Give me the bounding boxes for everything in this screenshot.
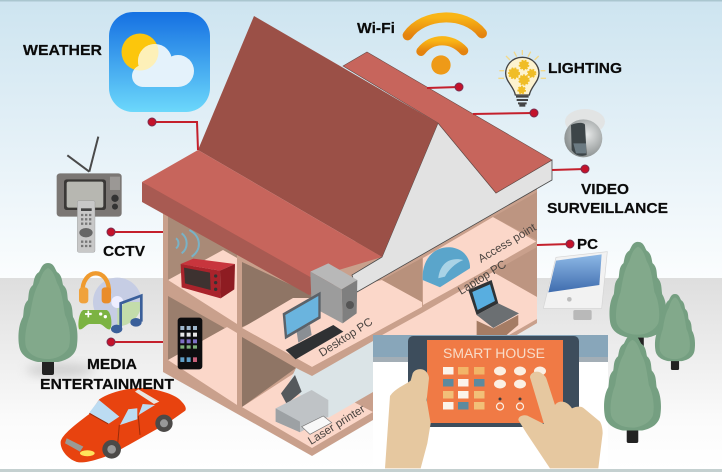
room: bottom left floor (168, 327, 237, 405)
label: Laser printer: Laser printer (306, 403, 367, 448)
label: VIDEO SURVEILLANCE (547, 181, 668, 217)
tablet control grid (443, 367, 484, 410)
connector: wifi (427, 83, 463, 91)
label: PC: PC (577, 236, 598, 253)
tablet body (408, 336, 579, 427)
connector: media (107, 338, 163, 346)
tablet (408, 336, 579, 427)
icon: laptop (468, 280, 519, 335)
room: centre floor (242, 280, 422, 367)
tablet panel: strip shadow (373, 357, 608, 362)
hand: left (385, 369, 431, 468)
icon: dome camera (564, 109, 605, 157)
connector: weather (148, 118, 198, 150)
icon: desktop PC (283, 263, 357, 359)
room: printer shaded wall (288, 341, 373, 418)
house base walls (163, 185, 537, 456)
icon: media entertainment (78, 273, 142, 333)
label: Wi-Fi: Wi-Fi (357, 20, 395, 37)
label: MEDIA ENTERTAINMENT: ENTERTAINMENT (40, 376, 174, 393)
icon: iMac (543, 252, 607, 320)
label: MEDIA ENTERTAINMENT (40, 356, 174, 393)
background: sky (0, 0, 722, 278)
icon: light bulb (498, 50, 546, 107)
roof: eave side (142, 182, 345, 295)
room: upper right floor (423, 217, 537, 305)
label: VIDEO SURVEILLANCE: SURVEILLANCE (547, 200, 668, 217)
tablet title: SMART HOUSE (443, 346, 545, 361)
icon: wireless waves (176, 230, 199, 257)
room: laptop floor (373, 272, 537, 415)
icon: TV with remote (57, 137, 122, 252)
roof: eave top (142, 150, 382, 278)
tablet screen (427, 340, 563, 423)
icon: car (61, 388, 186, 462)
icon: printer (276, 375, 332, 434)
connector: video (552, 165, 589, 173)
room: printer dark wall (242, 337, 296, 407)
upper right slab edge (422, 241, 537, 313)
label: VIDEO SURVEILLANCE: VIDEO (581, 181, 629, 198)
tablet panel: white backing (373, 362, 608, 469)
roof: right slope (343, 52, 552, 193)
top border strip (0, 0, 722, 2)
gable wall (352, 123, 552, 292)
room: top left wall (168, 200, 237, 281)
tree: right small (655, 294, 695, 370)
tree: front right (604, 335, 661, 443)
centre slab edge (242, 307, 422, 375)
room: bottom left wall (168, 296, 237, 360)
room: top left floor (168, 250, 237, 324)
icon: smartphone (178, 318, 202, 369)
room: upper right side wall (382, 258, 422, 302)
tree shadow: left (26, 363, 94, 377)
room: centre wall (242, 262, 315, 327)
laptop floor edge (373, 319, 537, 418)
bottom border strip (0, 469, 722, 472)
label: WEATHER: WEATHER (23, 42, 102, 59)
tablet panel: strip (373, 335, 608, 362)
hand: right (518, 372, 603, 468)
tree: left (18, 263, 78, 375)
icon: wifi (408, 17, 482, 75)
connector: lighting (473, 109, 538, 117)
icon: router (423, 247, 470, 287)
room: printer floor (242, 372, 373, 448)
connector: pc (537, 240, 574, 248)
room: upper right back wall (493, 192, 537, 240)
house (163, 185, 537, 456)
label: CCTV: CCTV (103, 243, 145, 260)
label: Desktop PC: Desktop PC (317, 316, 375, 360)
tablet dials (494, 366, 546, 410)
icon: oven (181, 259, 235, 298)
tree: right back large (609, 242, 667, 350)
background: ground (0, 278, 722, 469)
room: laptop back wall (493, 247, 537, 297)
label: MEDIA ENTERTAINMENT: MEDIA (87, 356, 137, 373)
connector: cctv (107, 228, 163, 236)
label: Access point: Access point (476, 221, 539, 266)
roof: dark main slope (198, 16, 438, 257)
label: LIGHTING: LIGHTING (548, 60, 622, 77)
icon: weather (109, 12, 210, 112)
label: Laptop PC: Laptop PC (456, 259, 509, 298)
